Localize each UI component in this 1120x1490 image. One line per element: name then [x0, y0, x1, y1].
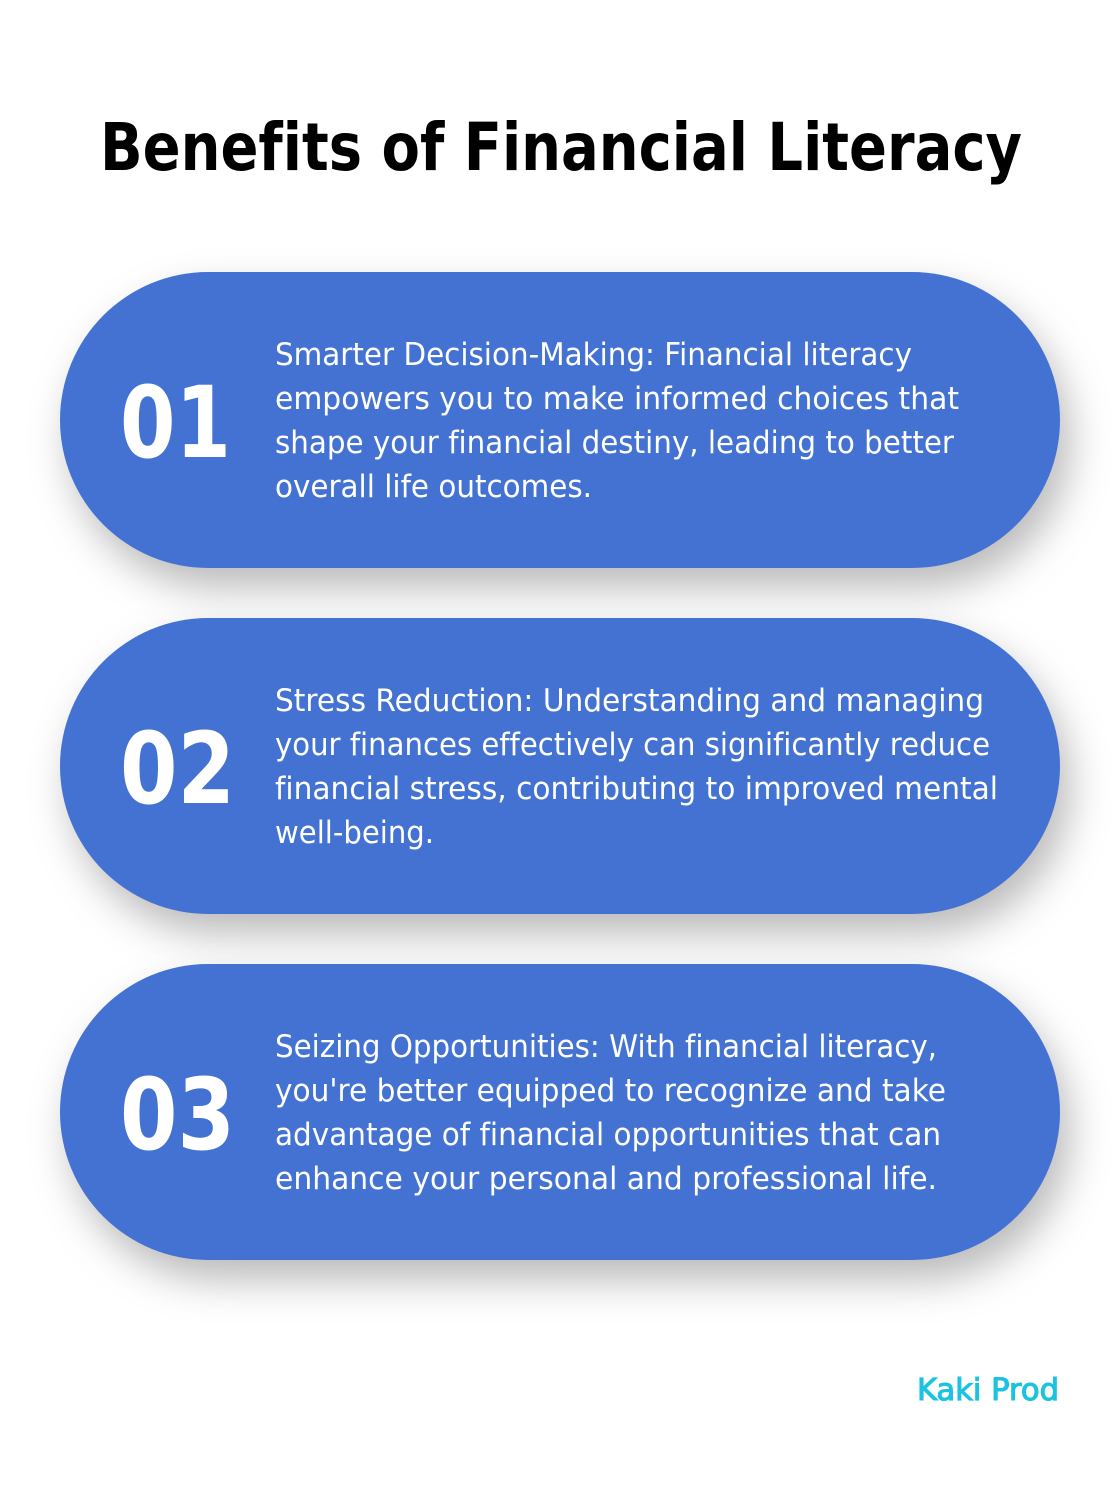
logo: Kaki Prod: Kaki Prod: [917, 1373, 1059, 1408]
description text: [275, 1029, 946, 1197]
description text: Seizing Opportunities: With financial literacy,: [275, 1029, 937, 1065]
description text: [275, 683, 998, 851]
description text: Smarter Decision-Making: Financial literacy: [275, 337, 912, 373]
number 03: 03: [120, 1058, 235, 1173]
description text: advantage of financial opportunities that can: [275, 1117, 941, 1153]
card background: [60, 618, 1060, 914]
description text: you're better equipped to recognize and take: [275, 1073, 946, 1109]
card background: [60, 272, 1060, 568]
description text: shape your financial destiny, leading to better: [275, 425, 954, 461]
card background: [60, 964, 1060, 1260]
panel: stress reduction: [60, 618, 1060, 914]
description text: Stress Reduction: Understanding and managing: [275, 683, 984, 719]
number 01: 01: [120, 366, 231, 481]
description text: enhance your personal and professional life.: [275, 1161, 937, 1197]
description text: financial stress, contributing to improved mental: [275, 771, 998, 807]
description text: [275, 337, 959, 505]
panel: seizing opportunities: [60, 964, 1060, 1260]
number 02: 02: [120, 712, 235, 827]
description text: empowers you to make informed choices that: [275, 381, 959, 417]
description text: your finances effectively can significantly reduce: [275, 727, 990, 763]
panel: smarter decision-making: [60, 272, 1060, 568]
description text: well-being.: [275, 815, 434, 851]
description text: overall life outcomes.: [275, 469, 592, 505]
